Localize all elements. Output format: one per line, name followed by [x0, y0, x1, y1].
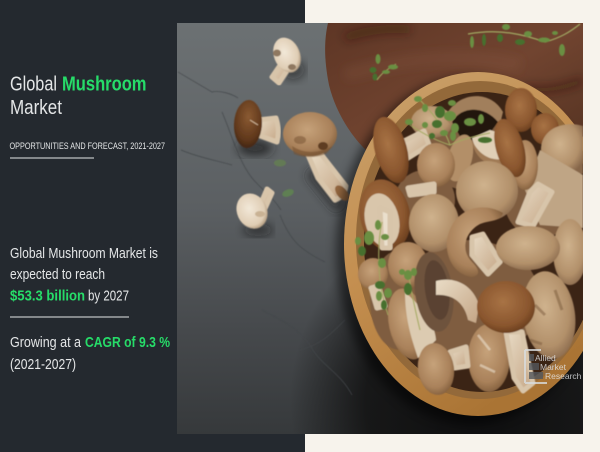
watermark: Allied Market Research: Market [540, 362, 567, 372]
back row [411, 106, 453, 138]
CAGR statement: CAGR of 9.3 % [85, 334, 170, 351]
market size statement: by 2027 [88, 288, 129, 304]
side row [388, 242, 428, 288]
title: Mushroom [62, 74, 146, 96]
loose mushroom: top white [268, 33, 306, 83]
market size statement: Global Mushroom Market is [10, 245, 158, 262]
CAGR statement: Growing at a [10, 334, 82, 351]
title [10, 74, 146, 119]
panel: cream right background [305, 0, 600, 452]
tan middle [409, 194, 459, 252]
bottom left stem and brown [450, 347, 468, 368]
herb: top right sprig [468, 24, 580, 56]
panel: mushroom photograph [177, 23, 600, 434]
subtitle underline [10, 158, 94, 159]
cloth [325, 23, 583, 150]
filler layer [370, 124, 560, 352]
cloth folds [345, 29, 583, 90]
market size statement: expected to reach [10, 266, 105, 283]
white stems right [518, 184, 552, 226]
large central [456, 161, 518, 221]
watermark: Allied Market Research [525, 350, 582, 383]
curved cap mushroom [472, 234, 500, 274]
bottom tan [468, 324, 510, 392]
divider [10, 316, 129, 318]
front mushroom [506, 332, 533, 391]
CAGR statement [10, 334, 170, 373]
dark gills mushroom [414, 252, 454, 332]
wooden bowl [336, 72, 600, 424]
herb: cloth sprig [370, 54, 398, 80]
watermark: Allied Market Research: Allied [535, 353, 556, 363]
white underside + middle cap [471, 129, 500, 160]
title: Global [10, 74, 57, 96]
subtitle: OPPORTUNITIES AND FORECAST, 2021-2027 [10, 141, 165, 152]
market size statement: $53.3 billion [10, 288, 85, 304]
round tan [417, 143, 455, 187]
herb sprigs [355, 24, 580, 330]
CAGR statement: (2021-2027) [10, 356, 76, 373]
big tan right [524, 270, 576, 360]
title: Market [10, 97, 62, 119]
mushrooms in the bowl [353, 88, 587, 397]
left open cap [360, 178, 410, 251]
text column [10, 74, 170, 373]
wide tan cap [496, 226, 560, 270]
market size statement [10, 245, 158, 304]
herb: bowl left [355, 220, 420, 330]
panel: dark left background [0, 0, 305, 452]
slate surface [177, 23, 583, 434]
watermark: Allied Market Research: Research [545, 371, 582, 381]
loose mushroom: large tan [283, 112, 352, 212]
open white [388, 288, 420, 360]
loose leaves [274, 160, 295, 198]
right tan [553, 219, 583, 286]
loose mushroom: white bottom [231, 188, 273, 236]
herb: bowl center [405, 96, 492, 145]
loose mushroom: dark brown [233, 99, 278, 156]
left capped mushroom [400, 131, 429, 160]
